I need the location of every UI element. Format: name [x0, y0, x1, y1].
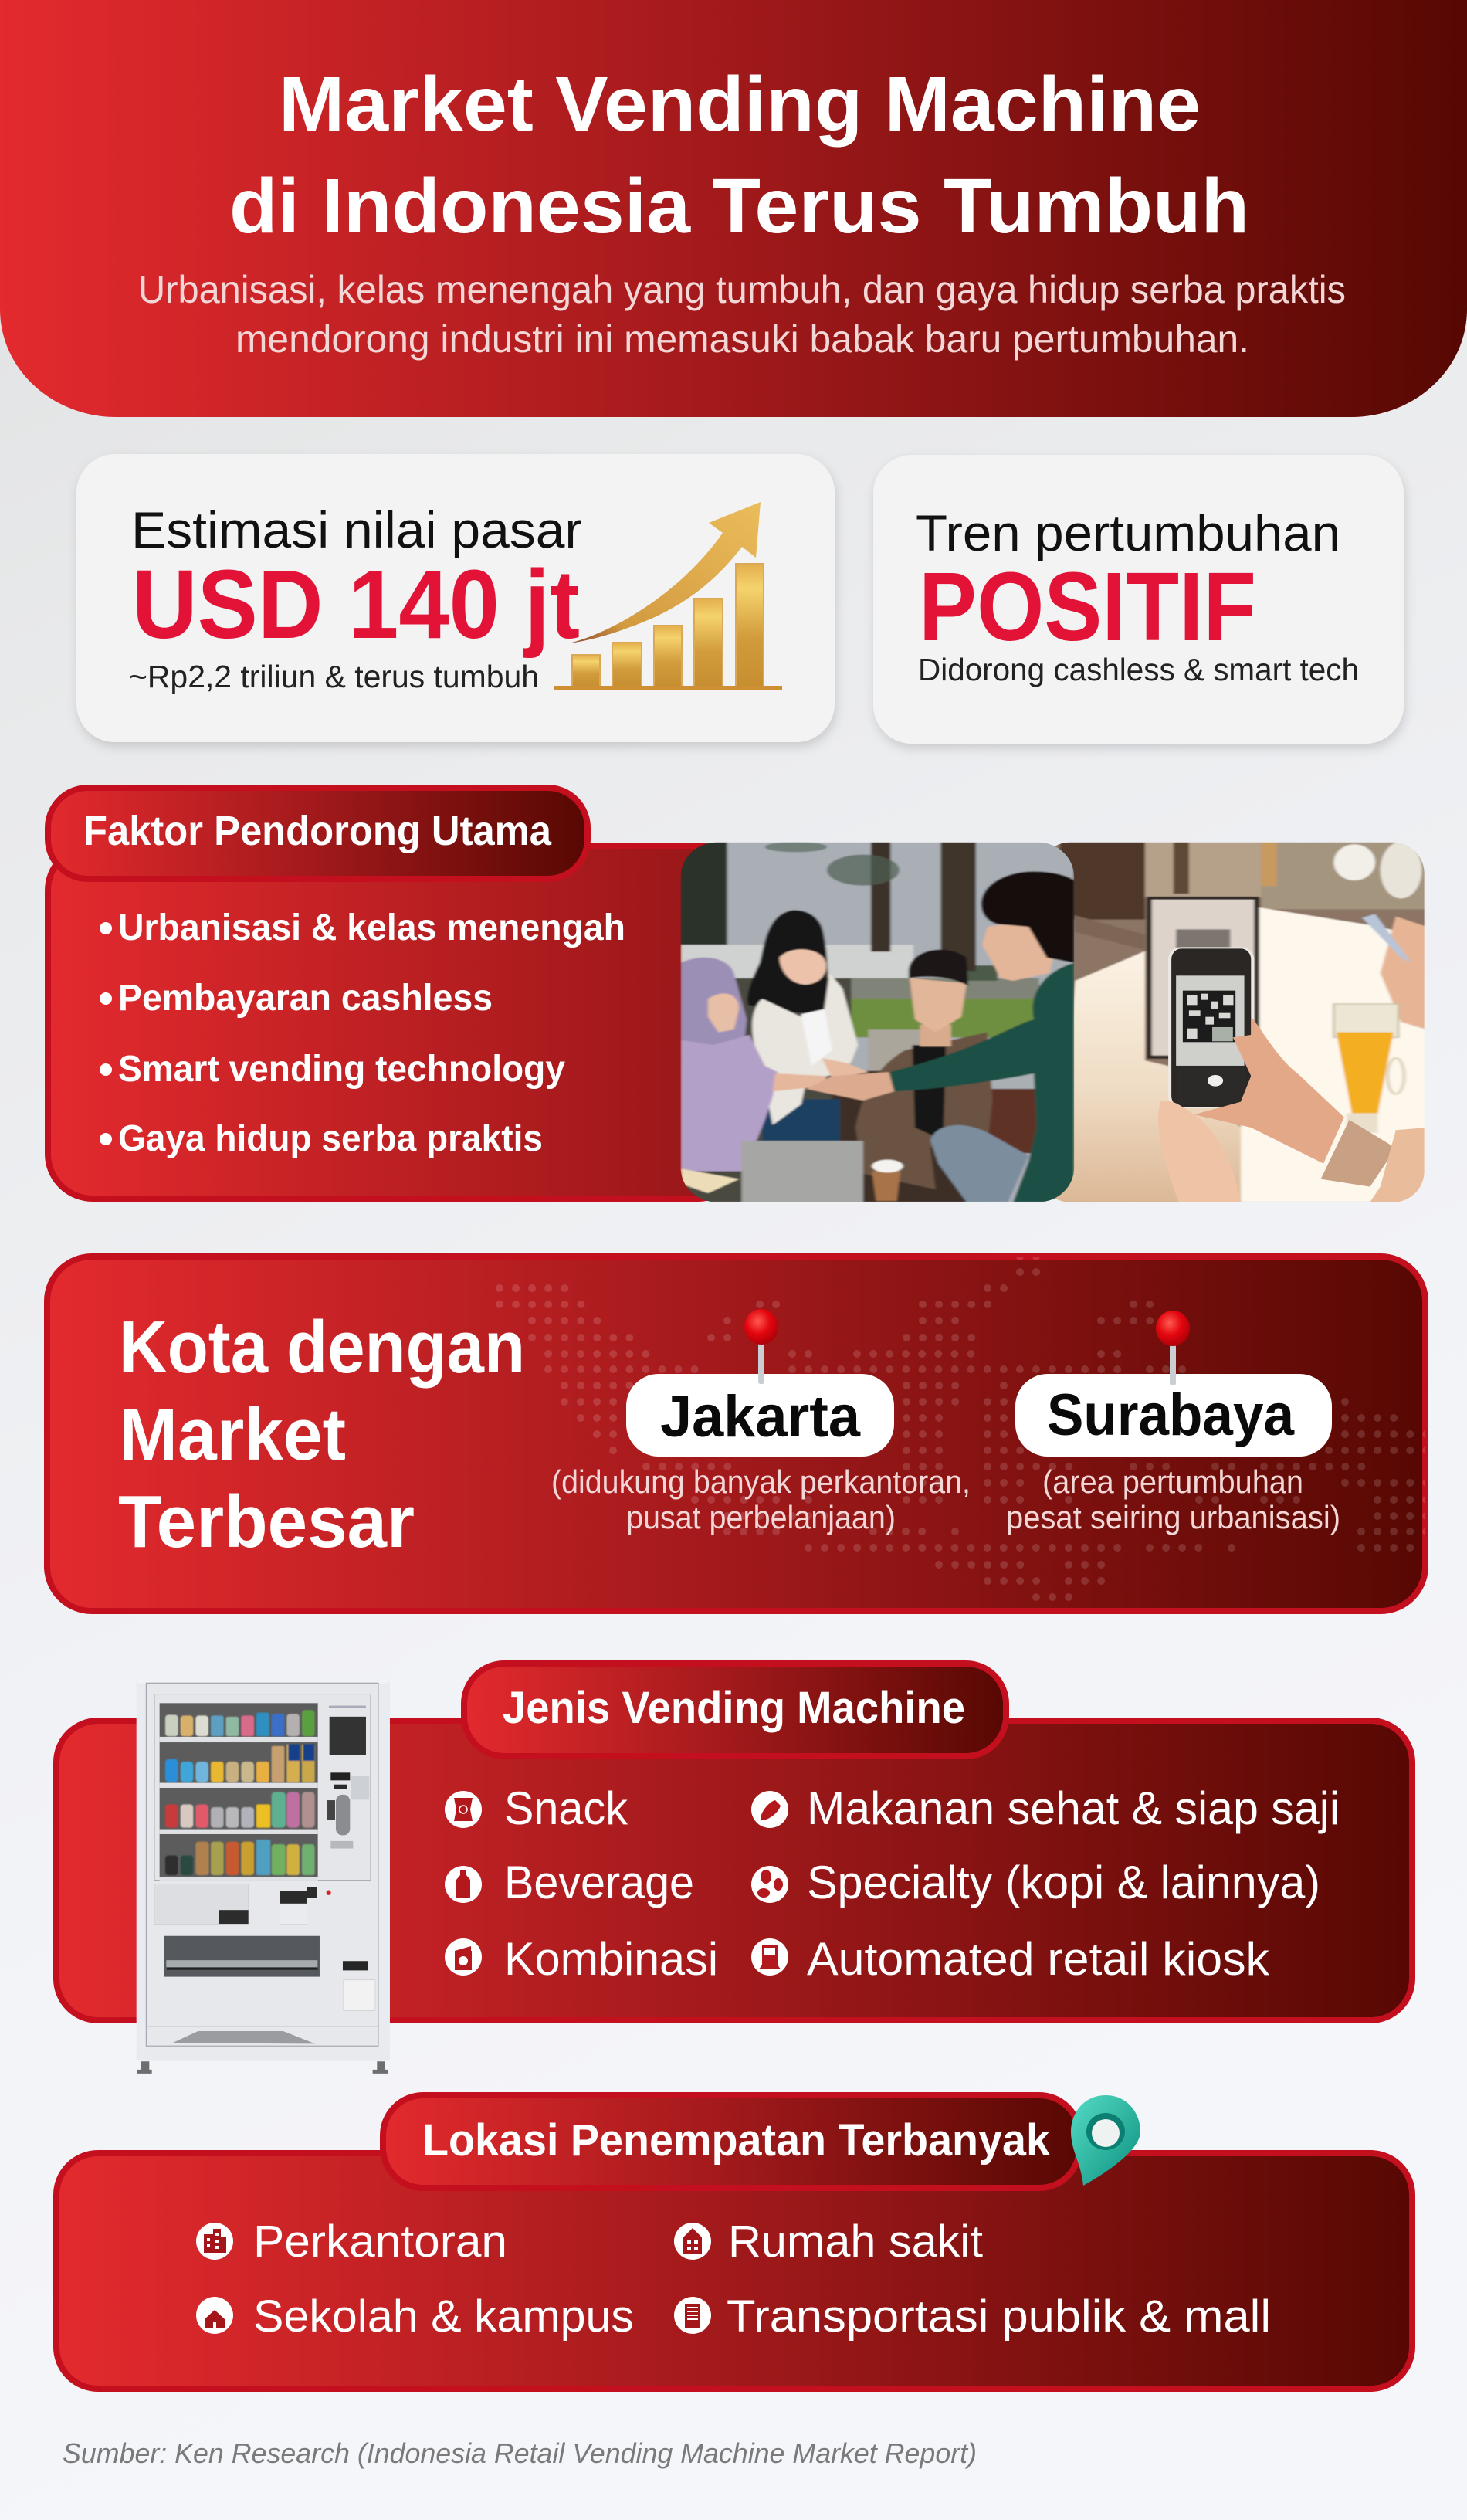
icon: red pin: [744, 1309, 778, 1384]
item: kombinasi: Kombinasi: [504, 1933, 718, 1985]
list: faktor: [100, 907, 625, 1159]
icon: tower: [685, 2304, 700, 2328]
panel: faktor pendorong utama: [48, 788, 1427, 1202]
heading pill: jenis vending machine: Jenis Vending Machine: [503, 1683, 965, 1733]
header banner: [0, 0, 1467, 417]
photo: scan QR: [1039, 842, 1427, 1202]
icon: combo box: [455, 1946, 472, 1970]
value: positif: POSITIF: [919, 552, 1256, 661]
icon: hospital: [683, 2228, 702, 2254]
icon: snack pack: [454, 1798, 473, 1821]
icon: carrot: [761, 1800, 781, 1820]
icon: teal location pin: [1071, 2095, 1140, 2186]
panel: tren pertumbuhan: [873, 455, 1404, 744]
item: snack: Snack: [504, 1782, 628, 1834]
item: rumah sakit: Rumah sakit: [728, 2216, 983, 2267]
heading: kota: Kota dengan: [119, 1306, 525, 1389]
item: specialty: Specialty (kopi & lainnya): [807, 1857, 1320, 1908]
icon: red pin: [1156, 1311, 1190, 1385]
item: makanan sehat: Makanan sehat & siap saji: [807, 1782, 1340, 1834]
title: di Indonesia Terus Tumbuh: [229, 163, 1249, 249]
item: sekolah: Sekolah & kampus: [253, 2291, 634, 2342]
heading: kota: [118, 1306, 525, 1563]
heading pill: lokasi: Lokasi Penempatan Terbanyak: [422, 2115, 1051, 2166]
icon: offices: [204, 2229, 226, 2253]
note: Jakarta: pusat perbelanjaan): [626, 1499, 896, 1535]
list: faktor: Urbanisasi & kelas menengah: [118, 907, 625, 948]
label: tren: Tren pertumbuhan: [916, 504, 1340, 561]
city: Jakarta: Jakarta: [660, 1384, 861, 1450]
icon: bottle: [456, 1870, 470, 1898]
item: snack: [445, 1782, 628, 1834]
icon: school: [205, 2310, 225, 2328]
panel: kota dengan market terbesar: [47, 1257, 1427, 1611]
value: USD 140 jt: USD 140 jt: [132, 550, 580, 659]
heading pill: jenis vending machine: [464, 1664, 1006, 1756]
panel: jenis vending machine: [56, 1664, 1412, 2074]
note: Surabaya: (area pertumbuhan: [1042, 1463, 1303, 1500]
note: Surabaya: [1006, 1463, 1340, 1535]
city: Surabaya: Surabaya: [1047, 1382, 1295, 1448]
icon: coffee beans: [757, 1870, 783, 1898]
heading: kota: Terbesar: [118, 1480, 415, 1563]
subtitle: Urbanisasi, kelas menengah yang tumbuh, dan gaya hidup serba praktis: [138, 268, 1346, 311]
subtitle: mendorong industri ini memasuki babak baru pertumbuhan.: [235, 317, 1249, 361]
heading pill: lokasi: [383, 2095, 1079, 2188]
city: Jakarta: [551, 1309, 971, 1535]
city: Surabaya: [1006, 1311, 1340, 1535]
item: perkantoran: Perkantoran: [253, 2216, 507, 2267]
list: faktor: Pembayaran cashless: [118, 978, 493, 1019]
heading pill: faktor pendorong utama: Faktor Pendorong Utama: [83, 808, 552, 854]
subtitle: [138, 268, 1346, 361]
note: Jakarta: [551, 1463, 971, 1535]
title: Market Vending Machine: [279, 61, 1201, 148]
dotted world map: [500, 1257, 1427, 1597]
label: estimasi: Estimasi nilai pasar: [131, 501, 582, 558]
item: transportasi: Transportasi publik & mall: [727, 2291, 1271, 2342]
item: beverage: Beverage: [504, 1857, 694, 1908]
photo: students hands together: [680, 842, 1074, 1202]
note: rupiah: ~Rp2,2 triliun & terus tumbuh: [129, 659, 539, 694]
note: Surabaya: pesat seiring urbanisasi): [1006, 1499, 1340, 1535]
item: automated kiosk: Automated retail kiosk: [807, 1933, 1270, 1985]
image: vending machine: [137, 1670, 390, 2074]
heading pill: faktor pendorong utama: [48, 788, 588, 879]
note: Jakarta: (didukung banyak perkantoran,: [551, 1463, 971, 1500]
title: [229, 61, 1249, 249]
note: didorong: Didorong cashless & smart tech: [918, 652, 1359, 687]
panel: lokasi penempatan terbanyak: [56, 2095, 1412, 2389]
list: faktor: Gaya hidup serba praktis: [118, 1118, 543, 1159]
list: faktor: Smart vending technology: [118, 1049, 565, 1090]
icon: gold growth chart: [554, 502, 782, 690]
panel: estimasi nilai pasar: [76, 454, 835, 742]
heading: kota: Market: [119, 1393, 346, 1476]
source note: Sumber: Ken Research (Indonesia Retail Vending Machine Market Report): [63, 2437, 977, 2469]
icon: kiosk: [759, 1945, 781, 1969]
